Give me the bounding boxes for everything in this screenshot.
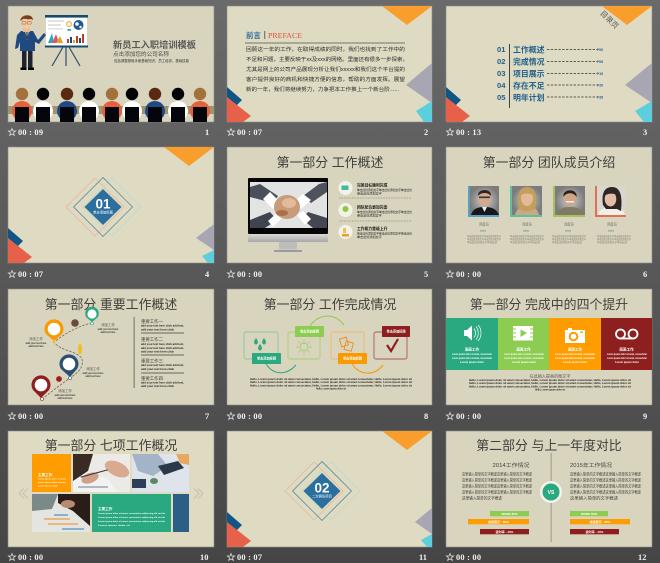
diamond badge 01: 单击添加标题: [93, 210, 114, 214]
key work list: add your text here click: [141, 384, 174, 388]
diamond badge 02: 02: [314, 480, 330, 496]
description text: Hello, Lorem ipsum dolor sit amet consectetur, Hello, Lorem ipsum dolor sit amet consectetur, Hello, Lorem ipsum dolor sit: [469, 382, 631, 385]
badge: VS: VS: [548, 490, 555, 496]
pin captions: add your text here: [98, 328, 119, 331]
tile: green: 主要工作: [98, 506, 113, 511]
pin: red: [32, 375, 50, 400]
panel: green speaker: 面面工作: [465, 346, 480, 352]
body text: 客户提供良好的商机和快捷方便的信息，帮助的方面发挥。展望: [246, 75, 405, 83]
footer slide 6: 6: [643, 270, 647, 279]
key work list: add your text here click: [141, 367, 174, 371]
coloured labels: 单击添加标题: [386, 328, 406, 334]
contents list: 03: [497, 69, 505, 78]
key work list: 重要工作三: [141, 358, 164, 364]
pin: orange: [44, 319, 64, 343]
slide 11: section 02: [227, 431, 432, 547]
item 1: [338, 181, 412, 196]
slide 12: year comparison: [446, 431, 652, 547]
panel: green speaker: Lorem ipsum dolor sit amet, consectetur: [452, 353, 492, 356]
pin captions: 添加工作: [29, 336, 43, 341]
icon: water drops: [254, 338, 266, 350]
contents list: 05: [497, 93, 506, 102]
slide 7: key work: [8, 289, 214, 405]
footer slide 4: 4: [205, 270, 210, 279]
title: 第一部分 七项工作概况: [45, 438, 177, 453]
contents list: 完成情况: [513, 56, 545, 66]
body text: 尤其是网上的公司产品展现分析让我们xxxxx和我们这个平台提的: [246, 65, 405, 73]
column: 2014: 延时率 - 40%: [496, 529, 514, 534]
slide 4: section 01: [8, 147, 214, 263]
pin captions: add your text here: [83, 372, 104, 375]
footer slide 7: [8, 412, 209, 421]
footer slide 3: 3: [643, 128, 647, 137]
panel: lime video: [498, 318, 549, 370]
column: 2015: WORK 80%: [581, 512, 597, 516]
tile: green: Lorem ipsum dolor sit: [98, 524, 130, 527]
pin captions: add text here: [58, 397, 73, 400]
column: 2015: 成果展示 - 85%: [590, 519, 611, 524]
body text: 回顾这一年的工作，在取得成绩的同时，我们也找到了工作中的: [246, 45, 405, 53]
member captions: 单击此处添加文字单击此处添加文字: [597, 234, 631, 238]
footer slide 10: [8, 553, 208, 562]
contents list: 01: [497, 45, 506, 54]
description text: Hello, Lorem ipsum dolor sit amet consectetur, Hello, Lorem ipsum dolor sit amet consectetur, Hello, Lorem ipsum dolor sit: [469, 386, 631, 388]
dashed route: [42, 323, 92, 399]
footer slide 12: 00 : 00: [456, 553, 481, 562]
title: 第一部分 工作概述: [277, 155, 383, 170]
key work list: add your text here click add text,: [141, 363, 184, 367]
member captions: 单击此处添加文字单击此处添加文字: [510, 237, 544, 241]
icon: sun: [296, 340, 312, 354]
slide 2: preface: [227, 6, 432, 122]
slide 1: title slide: [8, 6, 214, 122]
panel: green speaker: Lorem ipsum dolor: [460, 361, 484, 364]
pin captions: add text here: [29, 345, 44, 348]
footer slide 1: 1: [205, 128, 209, 137]
corner shapes: [227, 6, 432, 122]
description: 包括调整基础手册基础知识、员工培训、基础技能: [114, 58, 190, 63]
column: 2015: 这里输入简单的文字概述这里输入简单的文字概述: [570, 472, 641, 476]
column: 2015: 延时率 - 40%: [586, 529, 604, 534]
title: 第一部分 工作完成情况: [264, 297, 396, 312]
slide 10: seven items: [8, 431, 214, 547]
pin captions: add your text here: [55, 394, 76, 397]
item 3: 单击此处添加文字: [357, 234, 382, 239]
footer slide 11: 11: [419, 553, 427, 562]
footer slide 4: 00 : 07: [18, 270, 43, 279]
footer slide 10: 00 : 00: [18, 553, 43, 562]
member captions: 单击此处添加文字单击此处添加文字: [467, 237, 501, 241]
footer slide 10: 10: [200, 553, 208, 562]
tile: orange: Lorem ipsum dolor: [38, 486, 58, 488]
panel: red voicemail: [601, 318, 652, 370]
diamond badge 01: [66, 178, 141, 236]
member captions: 单击此处添加文字单击此处添加文字: [552, 234, 586, 238]
column: 2014: [462, 461, 532, 534]
description text: [250, 378, 412, 390]
tile: navy: [173, 494, 189, 532]
item 2: 团队配合更加完善: [357, 204, 388, 210]
coloured labels: [252, 326, 410, 364]
heading: preface: PREFACE: [268, 31, 302, 40]
member captions: 风度员: [564, 222, 574, 226]
photo: hands with pen: [73, 454, 132, 492]
item 3: 工作能力量级上升: [357, 226, 388, 231]
footer slide 12: [446, 553, 646, 562]
slide 6: team: [446, 147, 652, 263]
footer slide 8: 00 : 00: [237, 412, 262, 421]
footer slide 2: 2: [424, 128, 428, 137]
panel: lime video: Lorem ipsum dolor sit amet, consectetur: [504, 357, 544, 360]
member captions: 风度员: [607, 222, 617, 226]
icon: check mark: [387, 339, 398, 351]
caption: 在此插入提高的图文字: [530, 372, 570, 378]
contents list: P28: [597, 95, 603, 99]
contents list: P20: [597, 83, 603, 87]
contents list: P06: [597, 48, 603, 52]
panel: green speaker: [446, 318, 498, 370]
member captions: 单击此处添加文字单击此处添加文字: [467, 234, 501, 238]
key work list: add your text here click: [141, 328, 174, 332]
footer slide 2: 00 : 07: [237, 128, 262, 137]
panel: lime video: Lorem ipsum dolor: [512, 361, 536, 364]
dots: [56, 319, 82, 382]
description text: Hello, Lorem ipsum dolor sit amet consectetur, Hello, Lorem ipsum dolor sit amet consectetur, Hello, Lorem ipsum dolor sit: [250, 381, 412, 384]
pin: green: [85, 307, 99, 325]
slide 3: contents: [446, 6, 652, 122]
footer slide 2: [227, 128, 428, 137]
member captions: 单击此处添加文字单击此处: [597, 240, 627, 244]
audience row: [12, 88, 210, 122]
column: 2015: 2015年工作情况: [570, 461, 613, 469]
member captions: 单击此处添加文字单击此处: [510, 240, 540, 244]
slide 8: completion: [227, 289, 432, 405]
diamond badge 02: 二次两份项目: [312, 494, 332, 498]
panel: orange camera: 面面工作: [568, 346, 583, 352]
pin captions: [26, 322, 119, 400]
slide 5: work overview: [227, 147, 432, 263]
column: 2015: 这里输入简单的文字概述这里输入简单的文字概述: [570, 490, 641, 494]
member captions: 单击此处添加文字单击此处添加文字: [510, 234, 544, 238]
corner shapes: [227, 431, 432, 547]
photo: documents: [32, 494, 90, 532]
panel: green speaker: Lorem ipsum dolor sit amet, consectetur: [452, 357, 492, 360]
member captions: [467, 222, 631, 244]
member captions: 单击此处添加文字单击此处添加文字: [552, 237, 586, 241]
pin captions: add your text here: [26, 342, 47, 345]
contents list: 工作概述: [513, 44, 545, 54]
coloured labels: 单击添加标题: [257, 356, 277, 360]
footer slide 9: [446, 412, 647, 421]
footer slide 5: 5: [424, 270, 428, 279]
title: 第一部分 完成中的四个提升: [470, 297, 628, 312]
corner shapes: [446, 6, 652, 122]
contents list: 02: [497, 57, 505, 66]
panel: red voicemail: 面面工作: [619, 346, 634, 352]
footer slide 7: 00 : 00: [18, 412, 43, 421]
footer slide 4: [8, 270, 210, 279]
pin captions: add text here: [86, 375, 101, 378]
description text: Hello, Lorem ipsum dolor sit amet consectetur, Hello, Lorem ipsum dolor sit amet consectetur, Hello, Lorem ipsum dolor sit: [469, 379, 631, 382]
tile: orange: 主要工作: [38, 472, 53, 477]
column: 2014: 这里输入简单的文字概述这里输入简单的文字概述: [462, 490, 532, 494]
description text: [469, 379, 631, 392]
footer slide 6: [446, 270, 647, 279]
footer slide 11: [227, 553, 427, 562]
column: 2014: 这里输入简单的文字概述这里输入简单的文字概述: [462, 484, 532, 488]
footer slide 5: [227, 270, 428, 279]
key work list: [134, 317, 184, 388]
footer slide 8: 8: [424, 412, 428, 421]
tile: orange: Lorem ipsum dolor sit amet: [38, 481, 66, 484]
column: 2015: 这里输入简单的文字概述: [570, 496, 618, 500]
body text: 新的一年，我们将继续努力，力争把本工作推上一个新台阶......: [246, 85, 399, 93]
panel: red voicemail: Lorem ipsum dolor: [615, 361, 639, 364]
badge: VS: [540, 481, 562, 503]
key work list: 重要工作四: [141, 375, 163, 382]
footer slide 6: 00 : 00: [456, 270, 481, 279]
coloured labels: 单击添加标题: [300, 328, 320, 334]
pin captions: add text here: [101, 331, 116, 334]
body text: [246, 45, 408, 93]
title: 第一部分 重要工作概述: [45, 297, 177, 312]
item 3: 单击此处添加文字单击此处添加文字单击此处: [357, 230, 412, 236]
tile: green: Lorem ipsum dolor sit amet, consectetur adipiscing elit sed do: [98, 520, 166, 523]
key work list: add your text here click add text,: [141, 324, 184, 328]
icon: presenter man: [15, 15, 46, 70]
footer slide 3: 00 : 13: [456, 128, 481, 137]
diamond badge 01: 01: [95, 196, 111, 212]
item 1: 完美目标顺利完成: [357, 182, 388, 188]
contents list: P08: [597, 60, 603, 64]
item 3: [338, 225, 412, 239]
heading: preface: 前言: [246, 31, 261, 40]
contents list: 明年计划: [513, 92, 545, 102]
corner shapes: [8, 147, 214, 263]
member 4: [595, 186, 626, 217]
contents list: P15: [597, 72, 603, 76]
footer slide 9: 00 : 00: [456, 412, 481, 421]
label: contents page: 目录页: [598, 9, 620, 31]
footer slide 11: 00 : 07: [237, 553, 262, 562]
contents list: 项目展示: [513, 70, 545, 78]
member 2: [510, 186, 542, 217]
key work list: add your text here click add text,: [141, 346, 184, 350]
photo: laptop at desk: [132, 454, 189, 492]
description text: Hello, Lorem ipsum dolor sit amet consectetur, Hello, Lorem ipsum dolor sit amet consectetur, Hello, Lorem ipsum dolor sit: [250, 384, 412, 388]
contents list: [497, 44, 603, 108]
monitor with photo: [248, 178, 328, 252]
column: 2014: WORK 80%: [501, 512, 518, 516]
key work list: 重要工作一: [141, 318, 164, 325]
member 3: [553, 186, 585, 217]
footer slide 1: 00 : 09: [18, 128, 43, 137]
slide 9: four improvements: [446, 289, 652, 405]
item 2: 单击此处添加文字单击此处添加文字单击此处: [357, 209, 412, 214]
connecting arcs: [266, 316, 383, 373]
description text: Hello, Lorem ipsum dolor sit: [316, 388, 346, 390]
member captions: 风度员: [479, 222, 489, 226]
panel: red voicemail: Lorem ipsum dolor sit amet, consectetur: [607, 357, 647, 360]
key work list: add your text here click add text,: [141, 342, 184, 346]
column: 2015: [570, 461, 641, 534]
member captions: 风度员: [522, 222, 532, 226]
column: 2014: 这里输入简单的文字概述这里输入简单的文字概述: [462, 472, 532, 476]
arrows: [19, 488, 203, 498]
column: 2015: 这里输入简单的文字概述这里输入简单的文字概述: [570, 484, 641, 488]
column: 2014: 这里输入简单的文字概述: [462, 496, 502, 500]
key work list: 重要工作二: [141, 336, 164, 343]
footer slide 7: 7: [205, 412, 209, 421]
pin captions: 添加工作: [101, 322, 115, 327]
column: 2014: 成果展示 - 85%: [488, 519, 509, 524]
tile: green: Lorem ipsum dolor sit amet, consectetur adipiscing elit sed do: [98, 512, 166, 515]
tile: orange: Lorem ipsum dolor sit amet: [38, 478, 66, 480]
description text: Hello, Lorem ipsum dolor sit: [535, 388, 565, 392]
subtitle: 点击添加您的公司名称: [113, 50, 169, 58]
coloured labels: 单击添加标题: [343, 356, 363, 360]
description text: Hello, Lorem ipsum dolor sit amet consectetur, Hello, Lorem ipsum dolor sit amet consectetur, Hello, Lorem ipsum dolor sit: [250, 378, 412, 381]
panel: orange camera: Lorem ipsum dolor: [563, 361, 587, 364]
title: 新员工入职培训模板: [113, 39, 196, 50]
pin captions: 添加工作: [58, 388, 72, 393]
footer slide 3: [446, 128, 647, 137]
panel: orange camera: [549, 318, 601, 370]
pin: navy: [60, 354, 78, 380]
member captions: 单击此处添加文字单击此处: [552, 240, 582, 244]
icon: presentation board: [45, 15, 88, 66]
tile: orange: [32, 454, 71, 492]
member captions: 单击此处添加文字单击此处添加文字: [597, 237, 631, 241]
footer slide 9: 9: [643, 412, 647, 421]
panel: red voicemail: Lorem ipsum dolor sit amet, consectetur: [607, 353, 647, 356]
column: 2015: 这里输入简单的文字概述这里输入简单的文字概述: [570, 478, 641, 482]
body text: 不足和问题，主要反映于xx及xxx的网络。里面还有很多一步探索，: [246, 55, 408, 63]
item 1: 单击此处添加文字: [357, 190, 382, 196]
member captions: 单击此处添加文字单击此处: [467, 240, 497, 244]
icon: stacked papers: [340, 337, 353, 351]
footer slide 1: [8, 128, 209, 137]
column: 2014: 这里输入简单的文字概述这里输入简单的文字概述: [462, 478, 532, 482]
title: 第二部分 与上一年度对比: [476, 438, 622, 453]
diamond badge 02: [285, 462, 360, 520]
panel: lime video: 面面工作: [516, 346, 531, 352]
pin captions: 添加工作: [86, 366, 100, 371]
heading: preface: [246, 31, 302, 40]
centre line: [550, 453, 552, 542]
panel: lime video: Lorem ipsum dolor sit amet, consectetur: [504, 353, 544, 356]
panel: orange camera: Lorem ipsum dolor sit amet, consectetur: [555, 353, 595, 356]
title: 第一部分 团队成员介绍: [483, 155, 615, 170]
contents list: 04: [497, 81, 506, 90]
tile: green: [92, 494, 171, 532]
footer slide 12: 12: [638, 553, 646, 562]
item 2: [338, 203, 412, 218]
contents list: 存在不足: [513, 80, 545, 90]
member 1: [468, 186, 499, 217]
item 2: 单击此处添加文字: [357, 212, 382, 218]
tile: green: Lorem ipsum dolor sit amet, consectetur adipiscing elit sed do: [98, 516, 166, 519]
footer slide 5: 00 : 00: [237, 270, 262, 279]
column: 2014: 2014工作情况: [492, 461, 530, 469]
footer slide 8: [227, 412, 428, 421]
key work list: add your text here click: [141, 350, 174, 354]
outlined boxes: [244, 332, 407, 359]
item 1: 单击此处添加文字单击此处添加文字单击此处: [357, 187, 412, 192]
table band: [8, 106, 214, 114]
panel: orange camera: Lorem ipsum dolor sit amet, consectetur: [555, 357, 595, 360]
key work list: add your text here click add text,: [141, 380, 184, 384]
